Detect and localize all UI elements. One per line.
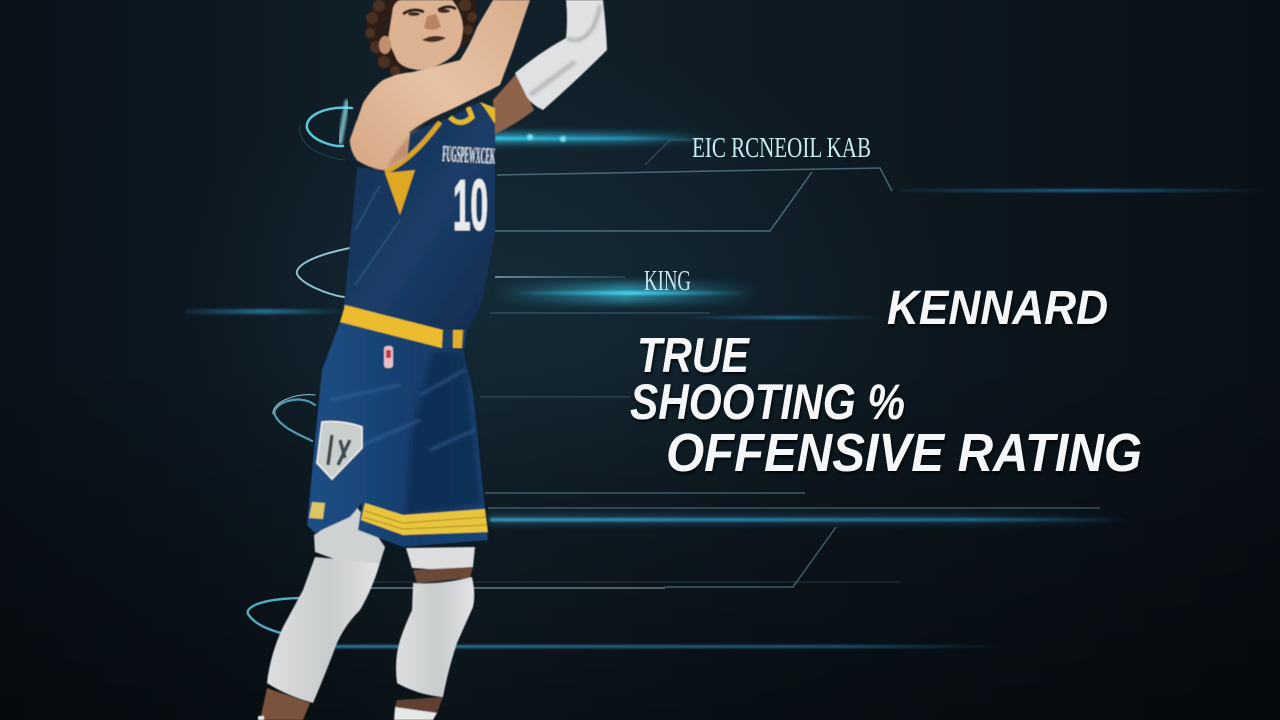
shorts [307,305,488,547]
jersey [343,102,496,330]
shorts logo [317,422,362,479]
stat label: true: TRUE [637,327,751,383]
name heading: KENNARD [887,280,1108,334]
side tag [309,502,325,519]
waist emblem [384,346,393,368]
small label: top: EIC RCNEOIL KAB [692,133,871,164]
undershorts and leg sleeves [258,507,475,720]
back arm with white sleeve [493,0,607,134]
arm shading [388,112,440,167]
head and hair [365,0,477,76]
stat label: shooting percentage: SHOOTING % [630,373,905,430]
swirl rings [248,102,352,634]
hem stripe [361,503,488,535]
stat label: offensive rating: OFFENSIVE RATING [666,423,1142,483]
waistband [340,305,443,348]
small label: middle: KING [644,266,691,297]
player: FUGSPEWXCEK [442,141,496,169]
shooting arm [350,0,530,170]
player [258,0,607,720]
light streaks and circuit lines [185,134,1265,648]
jersey: 10 [453,166,488,246]
